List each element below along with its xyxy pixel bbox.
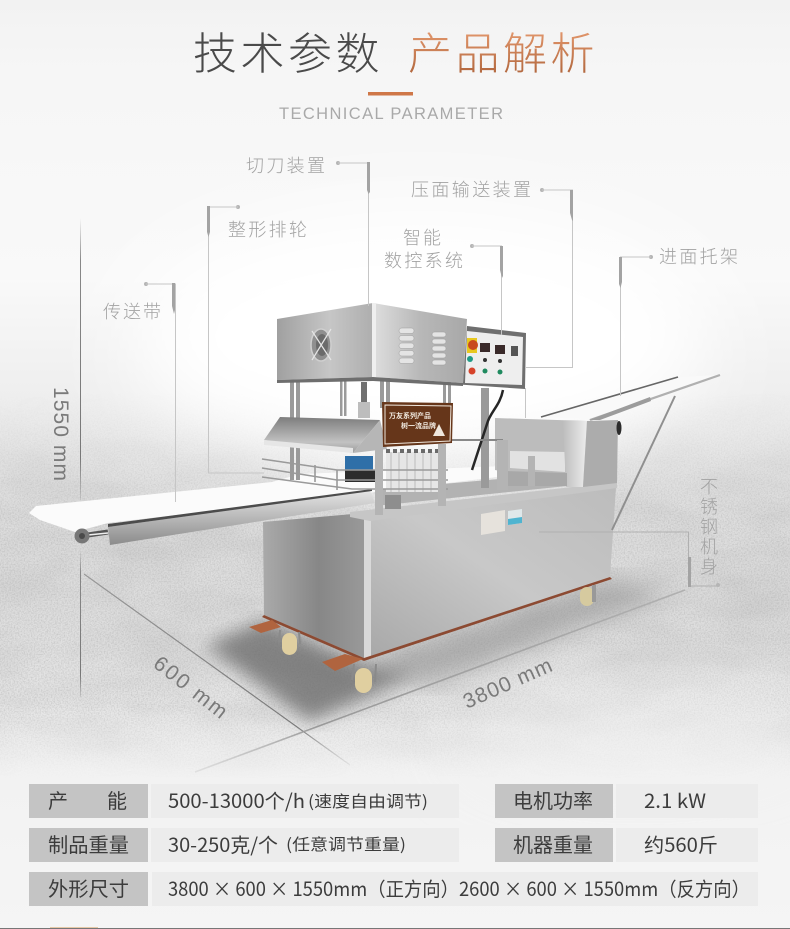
spec table [29,784,758,906]
callout: stainless steel body: 钢 [700,513,718,539]
callout: infeed bracket: 进面托架 [659,243,738,269]
spring column [358,382,370,418]
cables [472,390,503,470]
row: machine weight [495,828,758,862]
cutter hood [264,417,387,453]
brown sign [382,402,453,447]
cutter unit [345,451,444,492]
callout: stainless steel body: 不 [700,473,718,499]
row: capacity: 能 [107,785,127,814]
louvers [399,328,446,365]
title: 产品解析 [408,18,598,82]
callout: dough press conveyor: 压面输送装置 [411,176,531,202]
red base strip [262,577,612,661]
row: capacity: 500-13000个/h [168,785,305,814]
callout: cutter [246,152,370,306]
row: machine weight: 约560斤 [644,829,718,858]
row: product weight: (任意调节重量) [286,831,406,855]
row: motor power [495,784,758,818]
row: capacity: 产 [48,785,68,814]
callout: CNC system: 智能 [403,224,441,250]
callout: conveyor [103,282,176,502]
lower cabinet [263,482,617,658]
brown sign: 树一流品牌 [401,421,436,431]
dimension: depth line [84,574,350,765]
callout: shaping rollers: 整形排轮 [228,216,307,242]
dimension: height line [80,218,81,697]
floor shadow [205,578,675,722]
upper housing [277,303,467,386]
row: dimensions: 外形尺寸 [48,873,129,902]
orange title rule [368,92,413,96]
row: product weight: 制品重量 [48,829,129,858]
title [193,18,598,82]
right housing [495,418,622,487]
conveyor belt [29,466,567,545]
callout: dough press conveyor [411,176,573,418]
callout: conveyor: 传送带 [103,298,161,324]
fan [311,329,331,361]
dimension: length line [195,590,685,772]
dimension: length label: 3800 mm [460,654,556,714]
callout: CNC system [384,224,503,335]
callout: infeed bracket [619,243,738,396]
callout: stainless steel body: 机 [700,533,718,559]
machine [29,303,720,693]
title: 技术参数 [193,18,383,82]
row: product weight: 30-250克/个 [168,829,278,858]
row: dimensions [29,872,758,906]
callout: stainless steel body [539,473,720,587]
row: product weight [29,828,459,862]
callout: shaping rollers [207,205,307,473]
casters [279,585,596,693]
row: motor power: 2.1 kW [644,785,706,814]
guard rail [262,440,503,490]
control panel [452,326,526,389]
row: capacity: (速度自由调节) [308,788,428,812]
row: dimensions: 3800 × 600 × 1550mm（正方向）2600 × 600 × 1550mm（反方向） [168,873,750,902]
row: motor power: 电机功率 [513,785,593,814]
dimension: depth label: 600 mm [149,652,232,724]
callout: cutter: 切刀装置 [246,152,325,178]
dimension: height label: 1550 mm [49,387,72,481]
callout: CNC system: 数控系统 [384,247,463,273]
support legs [290,378,489,488]
brown sign: 万友系列产品 [389,411,431,421]
infeed bracket [541,375,720,530]
subtitle: TECHNICAL PARAMETER [279,105,503,123]
background: grey concrete texture fading to white [0,264,790,929]
callout: stainless steel body: 锈 [700,493,718,519]
row: capacity [29,784,459,818]
front columns [375,440,535,515]
callout: stainless steel body: 身 [700,553,718,579]
row: machine weight: 机器重量 [513,829,593,858]
base plates [249,620,363,671]
